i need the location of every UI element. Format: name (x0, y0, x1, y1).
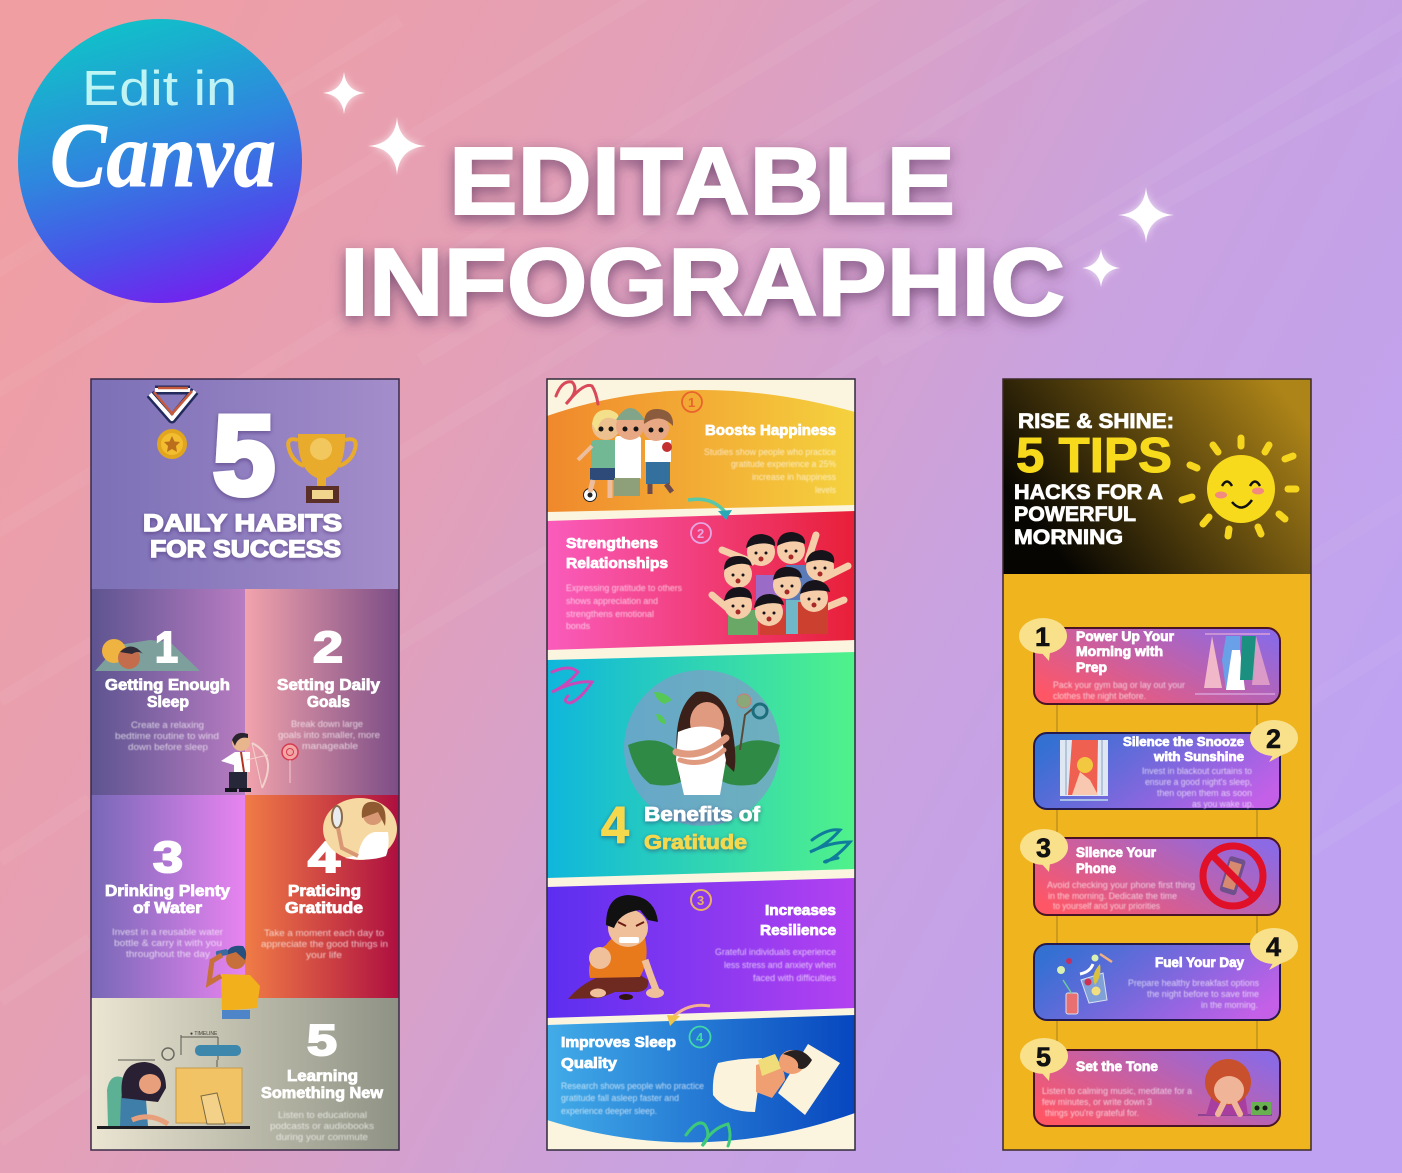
card 4: Fuel Your Day (1155, 955, 1244, 970)
habit 4: appreciate the good things in (261, 939, 388, 949)
habit 2: 2 (313, 623, 343, 672)
habit 1: Create a relaxing (131, 720, 204, 730)
habit 3: throughout the day (126, 949, 211, 959)
card 3 (1020, 829, 1280, 915)
benefit 2 text: Relationships (566, 555, 668, 572)
habit 2: goals into smaller, more (278, 730, 380, 740)
icon: woman at computer: ● TIMELINE (190, 1031, 218, 1037)
benefit 2 text: shows appreciation and (566, 596, 658, 606)
benefit 2 text: bonds (566, 621, 590, 631)
benefit 3 text (715, 903, 836, 983)
habit 3: of Water (133, 900, 202, 917)
illustration: determined boy (568, 895, 664, 1000)
habit 3 (105, 833, 230, 959)
benefit 4 text (561, 1035, 704, 1116)
icon: person drinking water (209, 946, 260, 1019)
icon: trophy (288, 434, 356, 503)
panel: rise and shine (1003, 379, 1311, 1150)
band 4 (547, 878, 855, 1018)
heading: daily habits for success: DAILY HABITS (143, 510, 342, 537)
habit 4: 4 (308, 833, 341, 882)
benefit 4 text: experience deeper sleep. (561, 1106, 657, 1116)
card 4: in the morning. (1201, 1000, 1258, 1010)
card 1: clothes the night before. (1053, 691, 1146, 701)
arrow: peach (667, 1005, 710, 1026)
habit 3: Drinking Plenty (105, 883, 230, 900)
habit 4: Take a moment each day to (264, 928, 384, 938)
number bubble 4 (1250, 928, 1298, 970)
benefit 3 text: Grateful individuals experience (715, 947, 836, 957)
number badge 4 (690, 1026, 710, 1048)
title: INFOGRAPHIC (340, 229, 1065, 336)
number bubble 4: 4 (1266, 932, 1281, 962)
habit 2: Setting Daily (277, 677, 380, 694)
habit 2: Goals (307, 694, 350, 711)
habit 5: during your commute (276, 1132, 368, 1142)
icon: girl daydreaming (1198, 1059, 1272, 1115)
heading: rise and shine 5 tips: HACKS FOR A (1014, 481, 1163, 504)
big number 4: 4 (601, 797, 629, 855)
benefit 3 text: Increases (765, 903, 836, 919)
number badge 1: 1 (688, 395, 695, 410)
icon: no phone (1203, 846, 1263, 906)
number badge 3: 3 (697, 893, 704, 908)
squiggle: teal (810, 830, 850, 862)
benefit 3 text: Resilience (760, 923, 836, 939)
card 3: to yourself and your priorities (1053, 901, 1160, 911)
arrow: teal (688, 499, 732, 520)
habit 5: 5 (307, 1016, 337, 1065)
card 2: Silence the Snooze (1123, 734, 1244, 749)
number badge 2: 2 (697, 526, 704, 541)
habit 3: bottle & carry it with you (114, 938, 222, 948)
card 2: then open them as soon (1157, 788, 1252, 798)
badge: Edit in Canva: Canva (50, 104, 276, 206)
habit 1: Getting Enough (105, 677, 230, 694)
icon: smiling sun (1182, 438, 1296, 536)
card 5: Listen to calming music, meditate for a (1042, 1086, 1192, 1096)
panel header (91, 379, 399, 589)
card 3: in the morning. Dedicate the time (1048, 891, 1177, 901)
cell 1 background (91, 589, 245, 795)
benefit 1 text: levels (815, 485, 836, 495)
band 5 (547, 1015, 855, 1142)
benefit 4 text: gratitude fall asleep faster and (561, 1093, 679, 1103)
cell 2 background (245, 589, 399, 795)
number badge 4: 4 (696, 1030, 704, 1045)
badge: Edit in Canva: Edit in (82, 62, 237, 116)
habit 5 (261, 1016, 384, 1142)
number bubble 3: 3 (1036, 833, 1051, 863)
big number 5: 5 (213, 393, 275, 518)
habit 4: Gratitude (285, 900, 363, 917)
benefit 4 text: Quality (561, 1056, 617, 1072)
benefit 4 text: Research shows people who practice (561, 1081, 704, 1091)
card 1 (1019, 618, 1280, 704)
benefit 2 text: Strengthens (566, 535, 658, 552)
benefit 2 text: strengthens emotional (566, 609, 654, 619)
heading: rise and shine 5 tips: MORNING (1014, 526, 1123, 549)
habit 2: manageable (302, 741, 358, 751)
icon: clothes rack (1195, 634, 1275, 694)
benefit 2 text (566, 535, 682, 631)
icon: archer with target (221, 733, 298, 792)
habit 3: Invest in a reusable water (112, 927, 223, 937)
habit 2 (277, 623, 380, 751)
card 5: few minutes, or write down 3 (1042, 1097, 1152, 1107)
number bubble 2 (1250, 720, 1298, 762)
card 5 (1020, 1038, 1280, 1126)
habit 5: Learning (287, 1068, 358, 1085)
habit 1: Sleep (147, 694, 189, 711)
benefit 4 text: Improves Sleep (561, 1035, 676, 1051)
sparkles (323, 72, 1174, 287)
number bubble 1 (1019, 618, 1067, 661)
card 2: Invest in blackout curtains to (1142, 766, 1252, 776)
card 1: Prep (1076, 660, 1107, 675)
illustration: group of children (712, 532, 848, 635)
benefit 1 text: increase in happiness (752, 472, 836, 482)
icon: medal (150, 388, 195, 459)
number badge 1 (682, 392, 702, 412)
habit 1 (105, 623, 230, 752)
benefit 3 text: less stress and anxiety when (724, 960, 836, 970)
panel header (1003, 379, 1311, 574)
title: EDITABLE (449, 128, 955, 235)
heading: benefits of gratitude (644, 804, 760, 854)
benefit 1 text: Boosts Happiness (705, 422, 836, 439)
habit 5: podcasts or audiobooks (270, 1121, 375, 1131)
card 3: Phone (1076, 861, 1116, 876)
icon: woman with mirror (323, 798, 397, 860)
habit 3: 3 (153, 833, 183, 882)
number bubble 5 (1020, 1038, 1068, 1081)
number badge 3 (691, 890, 711, 910)
badge: Edit in Canva (18, 19, 302, 303)
number badge 2 (691, 523, 711, 543)
heading: benefits of gratitude: Gratitude (644, 832, 747, 854)
benefit 2 text: Expressing gratitude to others (566, 583, 682, 593)
benefit 3 text: faced with difficulties (753, 973, 836, 983)
cell 5 background (91, 998, 399, 1150)
illustration: woman hugging herself (624, 670, 780, 826)
title (340, 128, 1065, 336)
habit 4: Praticing (288, 883, 361, 900)
benefit 1 text (704, 422, 836, 495)
icon: woman at computer (97, 1031, 250, 1129)
illustration: three kids (578, 408, 673, 502)
band 3 (547, 652, 855, 878)
habit 5: Listen to educational (278, 1110, 367, 1120)
card 2 (1034, 720, 1298, 809)
card 4: Prepare healthy breakfast options (1128, 978, 1259, 988)
icon: window with curtains (1060, 740, 1108, 800)
habit 1: bedtime routine to wind (115, 731, 219, 741)
heading: daily habits for success (143, 510, 342, 563)
card 1: Morning with (1076, 644, 1163, 659)
card 4: the night before to save time (1147, 989, 1259, 999)
cell 4 background (245, 795, 399, 998)
icon: sleeping person (95, 639, 200, 671)
habit 2: Break down large (291, 719, 363, 729)
card 2: with Sunshine (1153, 749, 1244, 764)
card 1: Power Up Your (1076, 629, 1175, 644)
card 1: Pack your gym bag or lay out your (1053, 680, 1185, 690)
heading: daily habits for success: FOR SUCCESS (150, 536, 341, 563)
card 2: ensure a good night's sleep, (1145, 777, 1252, 787)
heading: benefits of gratitude: Benefits of (644, 804, 760, 826)
band 1 (547, 390, 855, 512)
habit 1: 1 (155, 623, 178, 672)
icon: breakfast drink (1057, 954, 1112, 1014)
heading: rise and shine 5 tips: 5 TIPS (1016, 429, 1172, 483)
heading: rise and shine 5 tips: RISE & SHINE: (1018, 410, 1174, 433)
number bubble 1: 1 (1035, 622, 1050, 652)
panel: 5 daily habits (91, 379, 399, 1150)
card 5: things you're grateful for. (1045, 1108, 1139, 1118)
panel: benefits of gratitude (547, 379, 855, 1150)
illustration: sleeping person (713, 1044, 840, 1115)
habit 1: down before sleep (128, 742, 208, 752)
card 5: Set the Tone (1076, 1059, 1158, 1074)
habit 4 (261, 833, 388, 960)
benefit 1 text: gratitude experience a 25% (731, 459, 836, 469)
squiggle: green (686, 1123, 730, 1146)
heading: rise and shine 5 tips: POWERFUL (1014, 503, 1136, 526)
habit 5: Something New (261, 1085, 384, 1102)
benefit 1 text: Studies show people who practice (704, 447, 836, 457)
number bubble 3 (1020, 829, 1068, 872)
card 3: Silence Your (1076, 845, 1157, 860)
number bubble 2: 2 (1266, 724, 1281, 754)
heading: rise and shine 5 tips (1014, 410, 1174, 549)
band 2 (547, 511, 855, 650)
squiggle: red (556, 382, 598, 404)
card 2: as you wake up. (1192, 799, 1254, 809)
cell 3 background (91, 795, 245, 998)
squiggle: magenta (552, 668, 592, 703)
card 4 (1034, 928, 1298, 1020)
number bubble 5: 5 (1036, 1042, 1051, 1072)
habit 4: your life (306, 950, 342, 960)
card 3: Avoid checking your phone first thing (1047, 880, 1195, 890)
